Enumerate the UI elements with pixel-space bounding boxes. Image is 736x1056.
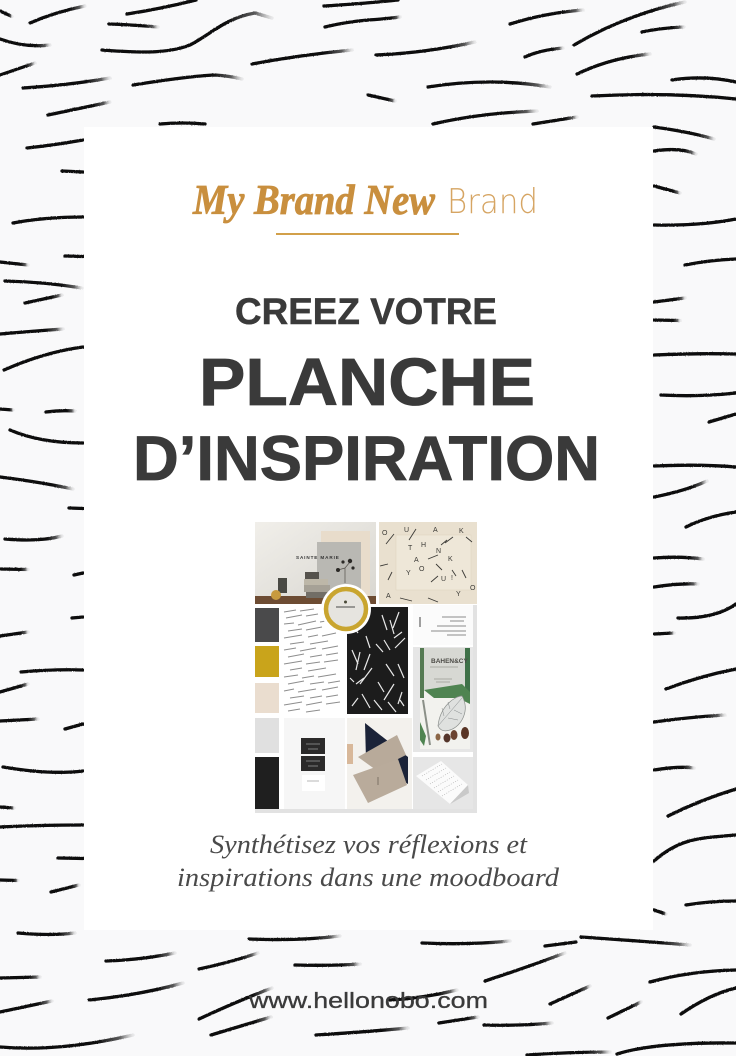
photo: thank you card: U (404, 527, 409, 534)
caption (177, 830, 560, 892)
photo: Sainte Marie shelf: SAINTE MARIE (296, 555, 340, 560)
photo: thank you card: Y (406, 570, 411, 577)
white panel (84, 127, 653, 930)
logo underline (276, 233, 459, 235)
moodboard backing (255, 522, 477, 813)
photo: thank you card: A (414, 557, 419, 564)
website url: www.hellonobo.com (248, 988, 488, 1013)
heading line 1: CREEZ VOTRE (235, 291, 497, 332)
photo: thank you card: K (459, 528, 464, 535)
photo: thank you card: T (408, 545, 413, 552)
photo: thank you card: O (382, 530, 388, 537)
photo: thank you card: ! (451, 575, 453, 582)
colour swatches (255, 608, 279, 809)
pattern: white with dark dashes (282, 607, 344, 714)
pattern: black with white dashes (347, 607, 408, 714)
logo light text: Brand (447, 182, 538, 222)
photo: thank you card: N (436, 548, 441, 555)
heading line 2: PLANCHE (199, 345, 535, 420)
photo: thank you card: A (433, 527, 438, 534)
moodboard grey edges (255, 605, 477, 813)
photo: thank you card: U (441, 576, 446, 583)
photo: thank you card: O (419, 566, 425, 573)
photo: Sainte Marie shelf (255, 522, 376, 604)
photo: thank you card: Y (456, 591, 461, 598)
logo: My Brand New Brand (192, 178, 538, 235)
chocolate packaging photo (413, 647, 473, 752)
chocolate packaging photo: BAHEN&CY (431, 658, 468, 665)
photo: thank you card: O (470, 585, 476, 592)
caption line 2: inspirations dans une moodboard (177, 863, 560, 892)
photo: thank you card: K (448, 556, 453, 563)
moodboard (255, 522, 477, 813)
folded tent card photo (413, 757, 473, 809)
caption line 1: Synthétisez vos réflexions et (210, 830, 528, 859)
logo script text: My Brand New (192, 178, 436, 224)
photo: thank you card: H (421, 542, 426, 549)
photo: thank you card (379, 522, 477, 604)
business cards photo (284, 718, 345, 809)
heading (133, 291, 600, 494)
logo badge: circle (321, 584, 371, 634)
heading line 3: D’INSPIRATION (133, 424, 600, 494)
white price card (413, 605, 473, 645)
photo: thank you card: A (386, 593, 391, 600)
envelopes photo (347, 718, 412, 809)
